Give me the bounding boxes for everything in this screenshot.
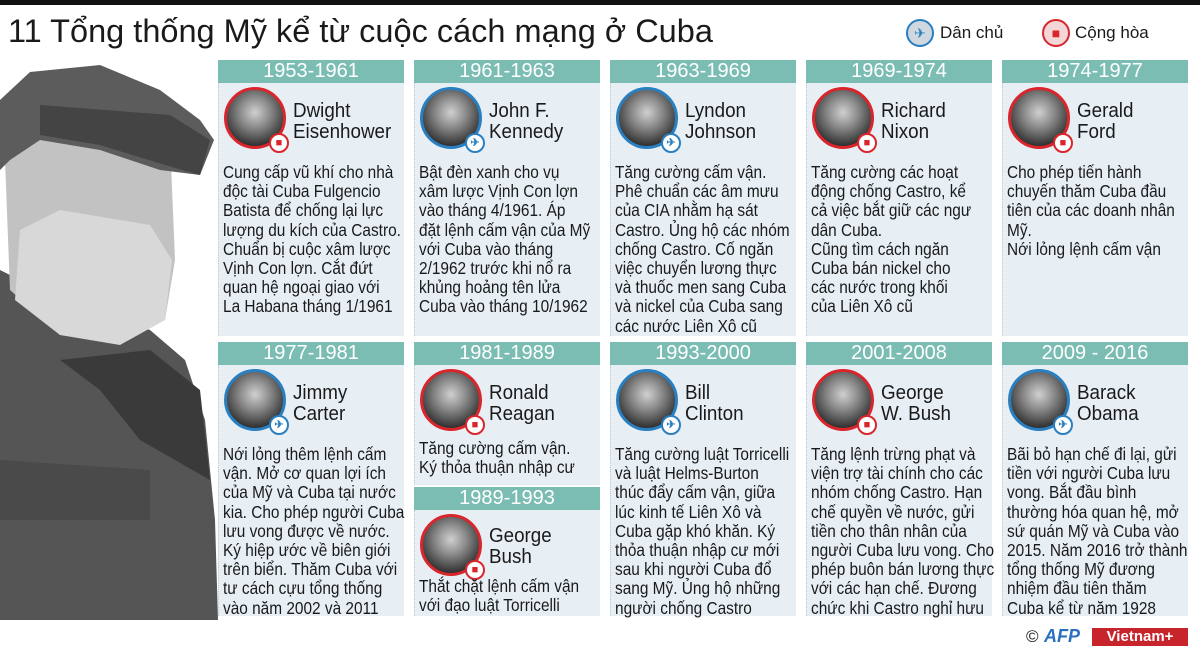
panel: Ford: Mỹ. [1007,220,1032,240]
panel: Kennedy: John F. [489,100,550,122]
panel: Clinton [610,342,796,618]
icon: republican: ■ [1052,25,1060,41]
panel: George Bush: 1989-1993 [459,487,555,509]
panel: George W. Bush: ■ [864,419,870,431]
photo: Fidel Castro [0,65,218,620]
panel: George Bush: Thắt chặt lệnh cấm vận [419,576,579,596]
panel: Obama: Bãi bỏ hạn chế đi lại, gửi [1007,444,1177,464]
panel: Ford: Nới lỏng lệnh cấm vận [1007,239,1161,259]
panel: Eisenhower: lượng du kích của Castro. [223,220,401,240]
panel: Kennedy: Kennedy [489,121,563,143]
panel: Johnson [610,60,796,336]
panel: Kennedy: Cuba vào tháng 10/1962 [419,296,588,316]
panel: Carter: vào năm 2002 và 2011 [223,598,379,618]
panel: Obama: Cuba kể từ năm 1928 [1007,598,1156,618]
panel: Clinton: Tăng cường luật Torricelli [615,444,789,464]
panel: Johnson: Lyndon [685,100,746,122]
icon: democrat: ✈ [914,25,926,41]
panel: Johnson: Castro. Ủng hộ các nhóm [615,220,790,240]
panel: Kennedy: với Cuba vào tháng [419,239,553,259]
panel: Obama: Obama [1077,403,1139,425]
panel: George W. Bush: 2001-2008 [851,342,947,364]
header [218,60,404,83]
panel: Johnson: Tăng cường cấm vận. [615,162,766,182]
panel: Nixon: cả việc bắt giữ các ngư [811,200,971,220]
panel: Carter: Carter [293,403,345,425]
panel: Carter: trên biển. Thăm Cuba với [223,559,397,579]
panel: Eisenhower: Dwight [293,100,350,122]
credit: AFP Vietnam+: © [1026,627,1039,646]
panel: Johnson: Phê chuẩn các âm mưu [615,181,779,201]
panel: Ford: Cho phép tiến hành [1007,162,1141,182]
panel: Clinton: Bill [685,382,710,404]
panel: Kennedy: 2/1962 trước khi nổ ra [419,258,571,278]
panel: George Bush [414,487,600,616]
panel: Carter: 1977-1981 [263,342,359,364]
panel: Clinton: thỏa thuận nhập cư mới [615,540,779,560]
panel: Ford [1002,60,1188,336]
credit: AFP Vietnam+ [1026,626,1188,646]
panel: Carter: lưu vong được về nước. [223,521,390,541]
panel: Obama: 2015. Năm 2016 trở thành [1007,540,1187,560]
panel: Kennedy [414,60,600,336]
icon: democrat badge [465,133,485,153]
panel: Johnson: và nickel của Cuba sang [615,296,783,316]
panel: George W. Bush: chế quyền về nước, gửi [811,502,974,522]
panel: Eisenhower: độc tài Cuba Fulgencio [223,181,381,201]
panel: George W. Bush: người Cuba lưu vong. Cho [811,540,994,560]
panel: Obama: ✈ [1058,419,1068,431]
panel: Nixon: ■ [864,137,870,149]
panel: Kennedy: xâm lược Vịnh Con lợn [419,181,578,201]
panel: Nixon: của Liên Xô cũ [811,296,913,316]
header: 1953-1961 [263,60,359,82]
panel: Clinton: sang Mỹ. Ủng hộ những [615,578,780,598]
credit: AFP Vietnam+: Vietnam+ [1107,628,1173,645]
panel: George Bush: ■ [472,564,478,576]
icon: democrat [906,19,934,47]
panel: Eisenhower: Chuẩn bị cuộc xâm lược [223,239,391,259]
panel: Obama: 2009 - 2016 [1042,342,1148,364]
panel: Carter: Jimmy [293,382,347,404]
panel: Johnson: 1963-1969 [655,60,751,82]
panel: Nixon: Cuba bán nickel cho [811,258,951,278]
panel: Ford: 1974-1977 [1047,60,1143,82]
panel: Obama: Barack [1077,382,1136,404]
panel: Clinton: lúc kinh tế Liên Xô và [615,502,761,522]
panel: Johnson: của CIA nhằm hạ sát [615,200,758,220]
panel: Nixon: 1969-1974 [851,60,947,82]
panel: Clinton: Clinton [685,403,744,425]
panel: Kennedy: đặt lệnh cấm vận của Mỹ [419,220,590,240]
panel: Nixon: dân Cuba. [811,220,882,240]
panel: Carter: Ký hiệp ước về biên giới [223,540,390,560]
panel: George W. Bush: với các hạn chế. Đương [811,578,977,598]
panel: Eisenhower: Cung cấp vũ khí cho nhà [223,162,393,182]
panel: Reagan: Ký thỏa thuận nhập cư [419,457,575,477]
panel: Obama: vong. Bắt đầu bình [1007,482,1136,502]
panel: Reagan: Tăng cường cấm vận. [419,438,570,458]
panel: Nixon: Nixon [881,121,929,143]
panel: Kennedy: 1961-1963 [459,60,555,82]
panel: Eisenhower: Eisenhower [293,121,391,143]
panel: Kennedy: vào tháng 4/1961. Áp [419,200,565,220]
panel: Carter: vận. Mở cơ quan lợi ích [223,463,386,483]
icon: democrat badge: ✈ [470,137,480,149]
panel: Obama: tổng thống Mỹ đương [1007,559,1155,579]
panel: Johnson: chống Castro. Cố ngăn [615,239,773,259]
panel: Eisenhower: La Habana tháng 1/1961 [223,296,393,316]
panel: Reagan: 1981-1989 [459,342,555,364]
title: 11 Tổng thống Mỹ kể từ cuộc cách mạng ở Cuba [8,13,713,49]
panel: George W. Bush [806,342,994,618]
panel: Reagan: Ronald [489,382,549,404]
panel: Nixon: Richard [881,100,946,122]
panel: Eisenhower [218,60,404,336]
panel: George W. Bush: phép buôn bán lương thực [811,559,994,579]
panel: George W. Bush: George [881,382,944,404]
panel: George Bush: Bush [489,546,532,568]
panel: Obama: sứ quán Mỹ và Cuba vào [1007,521,1179,541]
panel: Reagan [414,342,600,485]
panel: Nixon: động chống Castro, kể [811,181,966,201]
panel: George W. Bush: chức khi Castro nghỉ hưu [811,598,984,618]
panel: Ford: ■ [1060,137,1066,149]
panel: Clinton: và luật Helms-Burton [615,463,759,483]
panel: George W. Bush: nhóm chống Castro. Hạn [811,482,982,502]
credit: AFP Vietnam+: AFP [1044,626,1080,646]
panel: Carter: tư cách cựu tổng thống [223,578,382,598]
panel: Obama: nhiệm đầu tiên thăm [1007,578,1147,598]
panel: George Bush: George [489,525,552,547]
panel: Ford: Ford [1077,121,1116,143]
panel: Carter: của Mỹ và Cuba tại nước [223,482,396,502]
panel: George W. Bush: Tăng lệnh trừng phạt và [811,444,975,464]
panel: Clinton: 1993-2000 [655,342,751,364]
panel: Reagan: ■ [472,419,478,431]
panel: Johnson: và thuốc men sang Cuba [615,277,786,297]
panel: Eisenhower: Vịnh Con lợn. Cắt đứt [223,258,373,278]
portrait [224,87,286,149]
panel: Nixon: Cũng tìm cách ngăn [811,239,949,259]
icon: republican [1042,19,1070,47]
panel: Ford: chuyến thăm Cuba đầu [1007,181,1166,201]
panel: Nixon [806,60,992,336]
panel: George Bush: với đạo luật Torricelli [419,595,560,615]
panel: Ford: Gerald [1077,100,1133,122]
panel: Obama [1002,342,1188,618]
panel: Eisenhower: Batista để chống lại lực [223,200,383,220]
panel: Eisenhower: quan hệ ngoại giao với [223,277,380,297]
panel: Nixon: Tăng cường các hoạt [811,162,958,182]
panel: Clinton: thúc đẩy cấm vận, giữa [615,482,775,502]
panel: Clinton: ✈ [666,419,676,431]
panel: Johnson: việc chuyển lương thực [615,258,777,278]
panel: Clinton: người chống Castro [615,598,752,618]
legend: Cộng hòa [1075,23,1149,42]
icon: republican badge: ■ [276,137,282,149]
panel: Kennedy: Bật đèn xanh cho vụ [419,162,559,182]
panel: Johnson: ✈ [666,137,676,149]
panel: Johnson: các nước Liên Xô cũ [615,316,757,336]
panel: Kennedy: khủng hoảng tên lửa [419,277,560,297]
panel: Ford: tiên của các doanh nhân [1007,200,1175,220]
legend [906,19,1149,47]
panel: George W. Bush: W. Bush [881,403,951,425]
legend: Dân chủ [940,23,1003,42]
panel: Reagan: Reagan [489,403,555,425]
panel: George W. Bush: tiền cho thân nhân của [811,521,967,541]
panel: Carter: ✈ [274,419,284,431]
panel: Nixon: các nước trong khối [811,277,948,297]
panel: Carter: Nới lỏng thêm lệnh cấm [223,444,386,464]
panel: Johnson: Johnson [685,121,756,143]
panel: Obama: tiền với người Cuba lưu [1007,463,1170,483]
panel: Obama: thường hóa quan hệ, mở [1007,502,1179,522]
panel: George W. Bush: viện trợ tài chính cho các [811,463,983,483]
panel: Carter: kia. Cho phép người Cuba [223,502,404,522]
icon: republican badge [269,133,289,153]
panel: Carter [218,342,404,618]
panel: Clinton: Cuba gặp khó khăn. Ký [615,521,775,541]
panel: Clinton: sau khi người Cuba đổ [615,559,772,579]
